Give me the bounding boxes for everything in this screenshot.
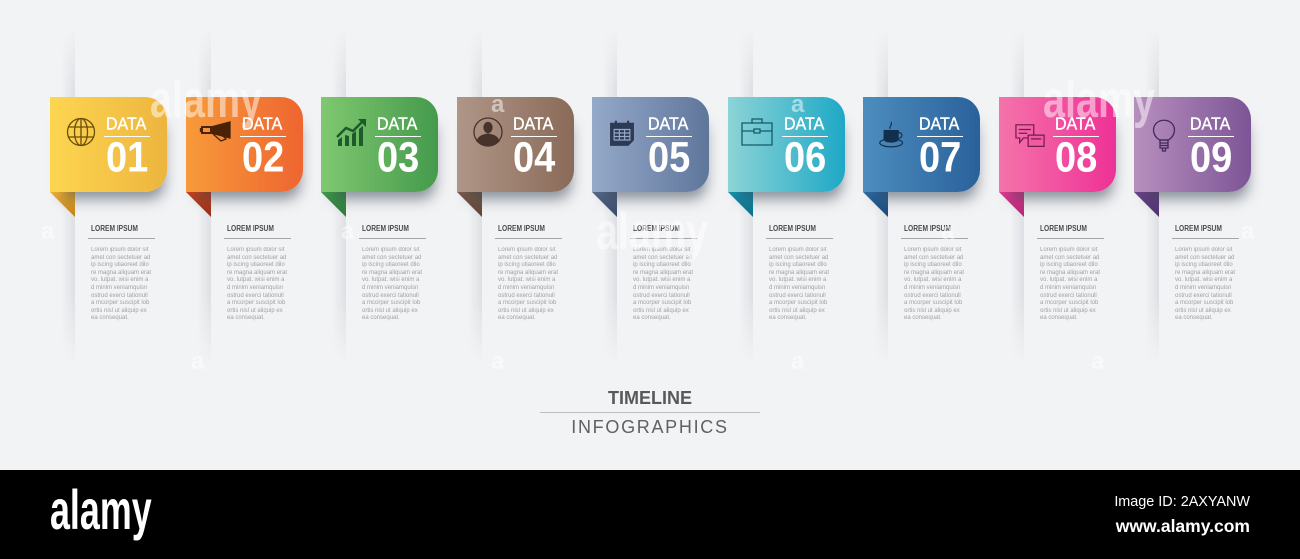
watermark: small marks: a	[41, 218, 54, 245]
step 05: ostrud exerci tationull	[633, 293, 690, 299]
step 08: 08	[1055, 134, 1097, 182]
step 07: ortis nisl ut aliquip ex	[904, 308, 960, 314]
step 03: 03	[377, 134, 419, 182]
step 01: LOREM IPSUM	[91, 224, 138, 233]
step 01: ip iscing utiaoreet dilo	[91, 262, 149, 268]
step 04: ea consequat.	[498, 315, 536, 321]
step 08: ip iscing utiaoreet dilo	[1040, 262, 1098, 268]
icon: calendar	[610, 120, 634, 146]
step 03: amet con sectetuer ad	[362, 255, 421, 261]
step 01: DATA	[106, 115, 146, 134]
step 05: d minim veniamquisn	[633, 285, 689, 291]
step 09: d minim veniamquisn	[1175, 285, 1231, 291]
step 07: Lorem ipsum dolor sit	[904, 247, 961, 253]
step 03: re magna aliquam erat	[362, 270, 422, 276]
step 02: ip iscing utiaoreet dilo	[227, 262, 285, 268]
step 04: amet con sectetuer ad	[498, 255, 557, 261]
step 03: ortis nisl ut aliquip ex	[362, 308, 418, 314]
step 09: ea consequat.	[1175, 315, 1213, 321]
watermark: small marks: a	[491, 91, 504, 118]
step 08: re magna aliquam erat	[1040, 270, 1100, 276]
step 04: d minim veniamquisn	[498, 285, 554, 291]
step 03: d minim veniamquisn	[362, 285, 418, 291]
step 09: a mcorper suscipit lob	[1175, 300, 1233, 306]
step 03: ea consequat.	[362, 315, 400, 321]
step 04: vo. lutpat. wisi enim a	[498, 277, 555, 283]
icon: businessman	[473, 117, 503, 147]
watermark: small marks: a	[941, 218, 954, 245]
step 09: Lorem ipsum dolor sit	[1175, 247, 1232, 253]
step 02: 02	[242, 134, 284, 182]
step 05: DATA	[648, 115, 688, 134]
step 06: re magna aliquam erat	[769, 270, 829, 276]
icon: chat bubbles	[1015, 124, 1045, 147]
step 08: d minim veniamquisn	[1040, 285, 1096, 291]
step 05: ortis nisl ut aliquip ex	[633, 308, 689, 314]
step 05: amet con sectetuer ad	[633, 255, 692, 261]
step 03: a mcorper suscipit lob	[362, 300, 420, 306]
step 06: Lorem ipsum dolor sit	[769, 247, 826, 253]
step 02	[186, 97, 310, 321]
icon: light bulb	[1152, 120, 1176, 152]
step 09: LOREM IPSUM	[1175, 224, 1222, 233]
step 06	[728, 97, 852, 321]
icon: briefcase	[741, 118, 773, 146]
step 07: DATA	[919, 115, 959, 134]
step 01: ea consequat.	[91, 315, 129, 321]
step 06: LOREM IPSUM	[769, 224, 816, 233]
step 04: Lorem ipsum dolor sit	[498, 247, 555, 253]
step 03: DATA	[377, 115, 417, 134]
step 04	[457, 97, 580, 321]
step 06: ea consequat.	[769, 315, 807, 321]
step 08: DATA	[1055, 115, 1095, 134]
image id: Image ID: 2AXYANW	[1114, 494, 1250, 510]
step 06: ostrud exerci tationull	[769, 293, 826, 299]
watermark: small marks: a	[791, 348, 804, 375]
step 08: Lorem ipsum dolor sit	[1040, 247, 1097, 253]
step 05: LOREM IPSUM	[633, 224, 680, 233]
step 05: Lorem ipsum dolor sit	[633, 247, 690, 253]
step 04: a mcorper suscipit lob	[498, 300, 556, 306]
step 08: ea consequat.	[1040, 315, 1078, 321]
step 03: ostrud exerci tationull	[362, 293, 419, 299]
step 04: re magna aliquam erat	[498, 270, 558, 276]
step 04: ip iscing utiaoreet dilo	[498, 262, 556, 268]
step 01: ortis nisl ut aliquip ex	[91, 308, 147, 314]
watermark: small marks: a	[791, 91, 804, 118]
step 03: vo. lutpat. wisi enim a	[362, 277, 419, 283]
step 04: ostrud exerci tationull	[498, 293, 555, 299]
step 09: ostrud exerci tationull	[1175, 293, 1232, 299]
step 01: Lorem ipsum dolor sit	[91, 247, 148, 253]
step 06: d minim veniamquisn	[769, 285, 825, 291]
step 02: Lorem ipsum dolor sit	[227, 247, 284, 253]
step 07: d minim veniamquisn	[904, 285, 960, 291]
step 05: a mcorper suscipit lob	[633, 300, 691, 306]
step 02: d minim veniamquisn	[227, 285, 283, 291]
watermark: small marks: a	[191, 348, 204, 375]
step 02: ostrud exerci tationull	[227, 293, 284, 299]
icon: globe	[66, 118, 96, 146]
step 08: amet con sectetuer ad	[1040, 255, 1099, 261]
step 05: ip iscing utiaoreet dilo	[633, 262, 691, 268]
step 03: ip iscing utiaoreet dilo	[362, 262, 420, 268]
watermark: small marks: a	[341, 218, 354, 245]
step 04: LOREM IPSUM	[498, 224, 545, 233]
step 02: re magna aliquam erat	[227, 270, 287, 276]
step 07: ea consequat.	[904, 315, 942, 321]
step 08: ostrud exerci tationull	[1040, 293, 1097, 299]
watermark: small marks: a	[1241, 218, 1254, 245]
watermark: alamy top right: alamy	[1043, 71, 1155, 129]
step 09	[1134, 97, 1258, 321]
step 03	[321, 97, 444, 321]
step 09: 09	[1190, 134, 1232, 182]
watermark: small marks: a	[1091, 348, 1104, 375]
step 05	[592, 97, 716, 321]
step 02: ea consequat.	[227, 315, 265, 321]
step 08: a mcorper suscipit lob	[1040, 300, 1098, 306]
step 06: vo. lutpat. wisi enim a	[769, 277, 826, 283]
step 04: DATA	[513, 115, 553, 134]
step 04: ortis nisl ut aliquip ex	[498, 308, 554, 314]
step 02: a mcorper suscipit lob	[227, 300, 285, 306]
step 03: LOREM IPSUM	[362, 224, 409, 233]
step 06: amet con sectetuer ad	[769, 255, 828, 261]
subtitle: infographics: INFOGRAPHICS	[571, 417, 729, 437]
step 08: ortis nisl ut aliquip ex	[1040, 308, 1096, 314]
step 07: amet con sectetuer ad	[904, 255, 963, 261]
step 01: ostrud exerci tationull	[91, 293, 148, 299]
step 07: ostrud exerci tationull	[904, 293, 961, 299]
step 07: vo. lutpat. wisi enim a	[904, 277, 961, 283]
step 09: re magna aliquam erat	[1175, 270, 1235, 276]
step 06: a mcorper suscipit lob	[769, 300, 827, 306]
icon: growth chart	[336, 119, 366, 146]
step 06: 06	[784, 134, 826, 182]
step 01: amet con sectetuer ad	[91, 255, 150, 261]
step 08	[999, 97, 1122, 321]
step 06: ip iscing utiaoreet dilo	[769, 262, 827, 268]
step 01: re magna aliquam erat	[91, 270, 151, 276]
background shadow strips	[66, 51, 1159, 338]
step 07: ip iscing utiaoreet dilo	[904, 262, 962, 268]
step 06: ortis nisl ut aliquip ex	[769, 308, 825, 314]
step 02: vo. lutpat. wisi enim a	[227, 277, 284, 283]
step 02: DATA	[242, 115, 282, 134]
step 03: Lorem ipsum dolor sit	[362, 247, 419, 253]
step 09: ip iscing utiaoreet dilo	[1175, 262, 1233, 268]
footer bar	[0, 470, 1300, 559]
step 02: ortis nisl ut aliquip ex	[227, 308, 283, 314]
watermark: small marks: a	[491, 348, 504, 375]
website: www.alamy.com	[1116, 516, 1250, 536]
step 01: 01	[106, 134, 148, 182]
step 07: a mcorper suscipit lob	[904, 300, 962, 306]
step 09: vo. lutpat. wisi enim a	[1175, 277, 1232, 283]
step 09: DATA	[1190, 115, 1230, 134]
step 07: 07	[919, 134, 961, 182]
step 01	[50, 97, 174, 321]
step 07: re magna aliquam erat	[904, 270, 964, 276]
watermark: alamy top left: alamy	[150, 71, 262, 129]
step 02: LOREM IPSUM	[227, 224, 274, 233]
step 01: vo. lutpat. wisi enim a	[91, 277, 148, 283]
watermark: alamy centre: alamy	[596, 203, 708, 261]
step 07	[863, 97, 986, 321]
step 01: d minim veniamquisn	[91, 285, 147, 291]
step 06: DATA	[784, 115, 824, 134]
step 09: ortis nisl ut aliquip ex	[1175, 308, 1231, 314]
step 04: 04	[513, 134, 555, 182]
step 08: vo. lutpat. wisi enim a	[1040, 277, 1097, 283]
step 08: LOREM IPSUM	[1040, 224, 1087, 233]
icon: megaphone	[200, 121, 231, 142]
title: timeline: TIMELINE	[608, 388, 692, 408]
step 02: amet con sectetuer ad	[227, 255, 286, 261]
step 07: LOREM IPSUM	[904, 224, 951, 233]
step 01: a mcorper suscipit lob	[91, 300, 149, 306]
step 05: 05	[648, 134, 690, 182]
icon: coffee cup	[879, 122, 903, 148]
step 05: vo. lutpat. wisi enim a	[633, 277, 690, 283]
step 09: amet con sectetuer ad	[1175, 255, 1234, 261]
step 05: ea consequat.	[633, 315, 671, 321]
step 05: re magna aliquam erat	[633, 270, 693, 276]
footer logo: alamy	[50, 478, 152, 541]
